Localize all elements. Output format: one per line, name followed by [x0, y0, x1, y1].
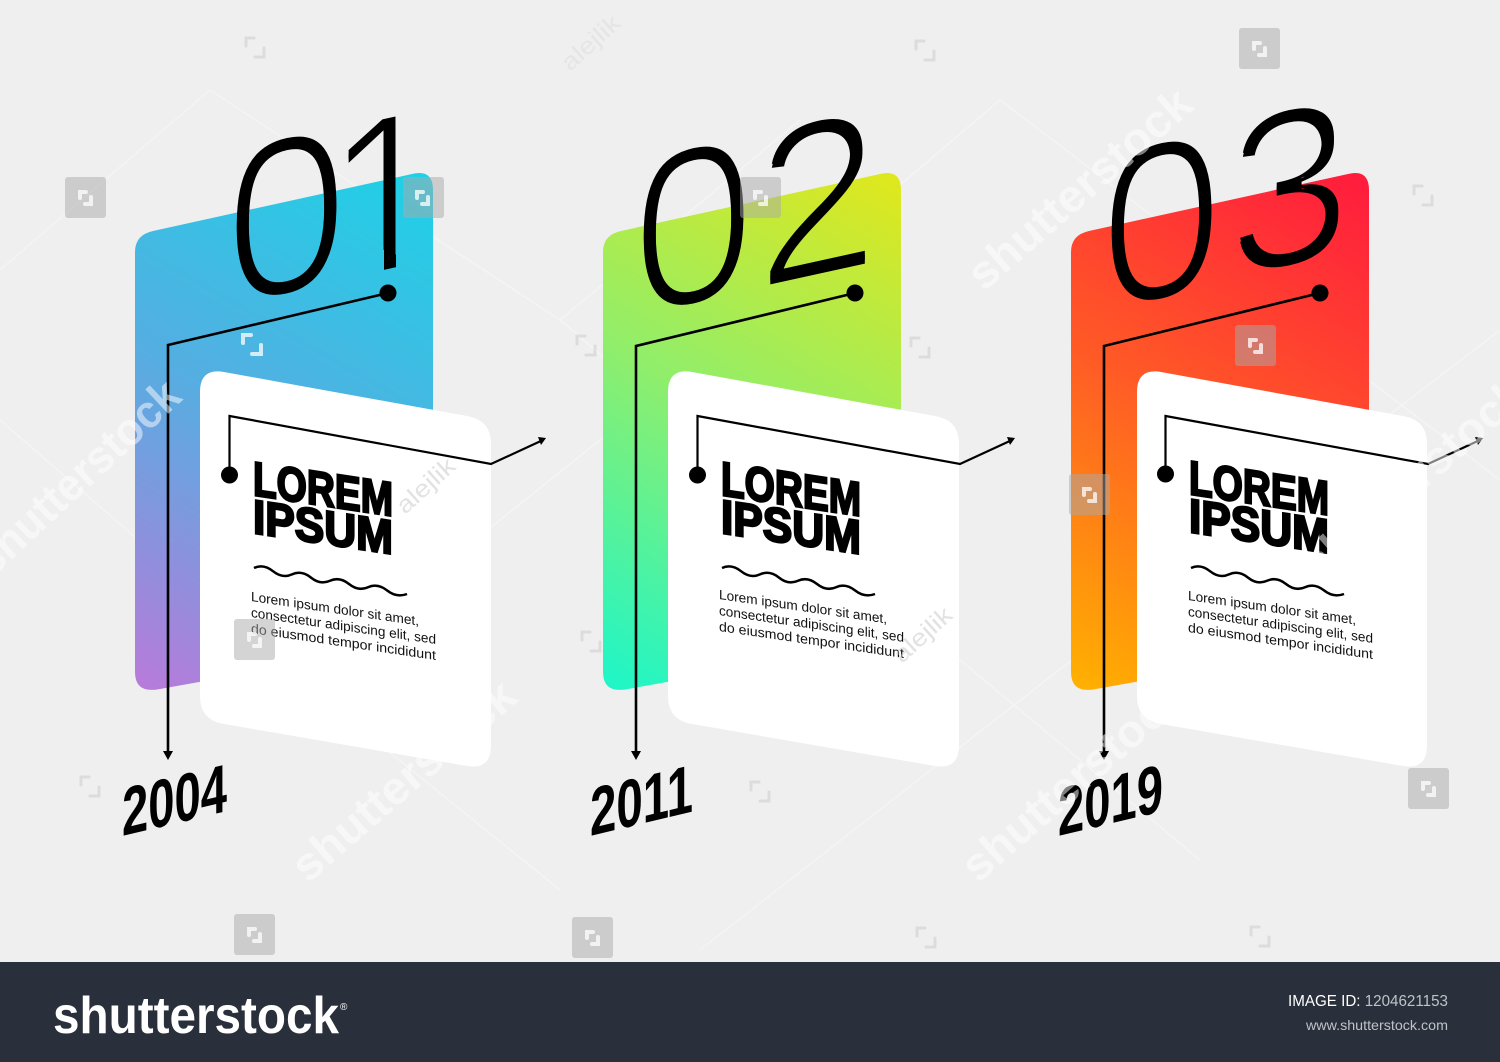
card connector with arrow: [221, 416, 546, 484]
body text: consectetur adipiscing elit, sed: [251, 605, 436, 647]
numeral 03: 3: [1227, 47, 1352, 325]
panel: blue gradient: [135, 173, 433, 690]
white card: [668, 371, 959, 767]
watermark text: alejlik: [391, 452, 462, 519]
numeral 03: 0: [1099, 80, 1224, 358]
numeral 01: 1: [323, 57, 448, 336]
numeral 03: [1112, 108, 1338, 300]
wavy divider: [1191, 566, 1344, 595]
numeral 02: 0: [631, 89, 756, 367]
site url: www.shutterstock.com: [1305, 1017, 1448, 1033]
year 2019: 2019: [1058, 750, 1163, 851]
body text: Lorem ipsum dolor sit amet,: [719, 587, 887, 626]
column 1: [124, 116, 546, 836]
white card: [1137, 371, 1427, 767]
card connector with arrow: [689, 416, 1015, 484]
body text: [719, 587, 904, 661]
body text: consectetur adipiscing elit, sed: [1188, 604, 1373, 646]
white card: [200, 371, 491, 767]
heading: IPSUM: [253, 490, 393, 565]
watermark text: shutterstock: [950, 668, 1196, 892]
year 2011: 2011: [590, 750, 693, 851]
heading: [253, 452, 393, 565]
numeral 02: 0: [631, 85, 756, 363]
column 3: [1058, 47, 1483, 851]
heading: [1189, 451, 1329, 564]
wavy divider: [254, 566, 407, 595]
shutterstock logo: shutterstock: [53, 987, 339, 1045]
image id: IMAGE ID: 1204621153: [1288, 993, 1448, 1010]
numeral 02: [644, 119, 865, 305]
connector to year 2019: [1099, 284, 1328, 760]
heading: LOREM: [721, 452, 861, 527]
numeral 01: 0: [224, 79, 349, 357]
heading: IPSUM: [721, 490, 861, 565]
body text: consectetur adipiscing elit, sed: [719, 603, 904, 645]
numeral 01: [236, 116, 396, 295]
numeral 01: 1: [323, 53, 448, 332]
watermark text: alejlik: [888, 601, 959, 668]
column 2: [590, 58, 1015, 851]
footer bar: [0, 962, 1500, 1062]
panel: green gradient: [603, 173, 901, 690]
numeral 02: 2: [755, 62, 880, 340]
panel: red-orange gradient: [1071, 173, 1369, 690]
year 2004: 2004: [122, 750, 227, 851]
watermark text: shutterstock: [956, 76, 1202, 300]
heading: IPSUM: [1189, 489, 1329, 564]
heading: LOREM: [253, 452, 393, 527]
watermark text: shutterstock: [280, 668, 526, 892]
numeral 02: 2: [755, 58, 880, 336]
body text: Lorem ipsum dolor sit amet,: [1188, 588, 1356, 627]
wavy divider: [722, 566, 875, 595]
numeral 01: 0: [224, 75, 349, 353]
body text: do eiusmod tempor incididunt: [719, 619, 904, 661]
numeral 03: 0: [1099, 84, 1224, 362]
heading: LOREM: [1189, 451, 1329, 526]
connector to year 2004: [163, 284, 396, 760]
numeral 03: 3: [1227, 51, 1352, 329]
body text: [1188, 588, 1373, 662]
body text: do eiusmod tempor incididunt: [1188, 620, 1373, 662]
heading: [721, 452, 861, 565]
body text: [251, 589, 436, 663]
watermark text: alejlik: [556, 9, 627, 76]
body text: Lorem ipsum dolor sit amet,: [251, 589, 419, 628]
registered mark: ®: [340, 1002, 348, 1013]
card connector with arrow: [1157, 416, 1483, 482]
connector to year 2011: [631, 284, 864, 760]
body text: do eiusmod tempor incididunt: [251, 621, 436, 663]
